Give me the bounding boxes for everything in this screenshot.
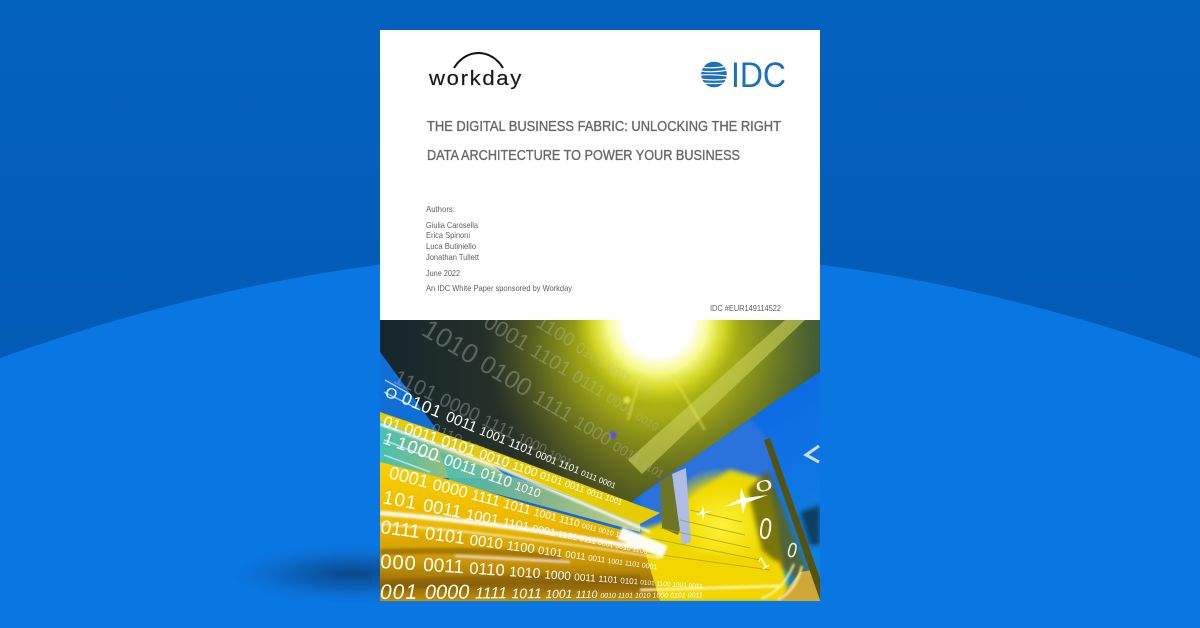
floating digits and chevron at right: 0: [785, 539, 799, 564]
left-hand blue towers: [380, 352, 438, 432]
pale reflection band: [440, 452, 640, 532]
floating digits and chevron at right: 1: [754, 552, 772, 573]
authors and publication details: [426, 204, 573, 293]
white binary digits: O 0101 0011 1001 1101 0001 1101 0111 0001: [386, 388, 615, 488]
floating digits and chevron at right: 0: [757, 511, 774, 546]
diagonal yellow band: [380, 412, 660, 524]
authors and publication details: An IDC White Paper sponsored by Workday: [426, 283, 573, 293]
sun flare: [580, 320, 736, 398]
white binary digits: 0001 0000 1111 1011 1001 1110 0011 0010 1101: [390, 466, 630, 540]
logo: IDC: [700, 56, 786, 95]
icon: striped globe: [700, 62, 728, 87]
title: DATA ARCHITECTURE TO POWER YOUR BUSINESS: [427, 148, 740, 164]
authors and publication details: June 2022: [426, 268, 460, 278]
ghost binary digits on overpass: 1101 0000 1111 1000 1001: [394, 371, 571, 466]
background: lighter blue curved dome: [0, 250, 1200, 628]
white binary digits: 0111 0101 0010 1100 0101 0011 0011 1001 1101 0001: [381, 520, 657, 570]
logo: IDC: IDC: [731, 56, 786, 95]
overpass underside: [380, 320, 820, 510]
title: [427, 119, 781, 164]
sign post: [764, 438, 820, 600]
white binary digits: 001 0000 1111 1011 1001 1110 0010 1101 1010 1000 0101 0011: [380, 584, 702, 600]
overpass beam: [628, 320, 805, 474]
sky: [380, 352, 820, 601]
authors and publication details: Authors:: [426, 204, 455, 214]
ghost binary digits on overpass: 0110 1010 0001: [432, 424, 516, 471]
yellow light trail base: [380, 462, 660, 601]
white binary digits: 01 0011 0101 0010 1100 0101 0011 0011 1001: [384, 416, 622, 506]
authors and publication details: Jonathan Tullett: [426, 252, 480, 262]
white binary digits: 1 1000 0011 0110 1010: [383, 433, 540, 497]
white paper cover page: [380, 30, 820, 601]
authors and publication details: Giulia Carosella: [426, 220, 478, 230]
white light streaks: [380, 424, 802, 600]
tiny building window lines: [640, 510, 770, 570]
far city towers: [640, 418, 775, 530]
logo: workday: workday: [428, 68, 523, 90]
floating digits and chevron at right: [754, 446, 819, 573]
white binary digits: [380, 388, 702, 600]
white binary digits: 000 0011 0110 1010 1000 0011 1101 0101 0101 1100 1001 0011: [381, 554, 702, 588]
logo: workday: [428, 53, 523, 90]
city glow and buildings: [640, 467, 820, 601]
cover photo: light trails, city and binary digits: [380, 320, 820, 601]
lens flare spots: [610, 375, 705, 438]
authors and publication details: Erica Spinoni: [426, 230, 470, 240]
floating digits and chevron at right: 0: [754, 476, 775, 497]
white binary digits: 101 0011 1001 1101 0001 1101 0111 0001 0010 1100: [383, 491, 648, 554]
star glints: [696, 488, 768, 521]
ghost binary digits on overpass: 1100 0101 0011 1000: [536, 320, 652, 396]
ghost binary digits on overpass: 0001 1101 0111 0001 0010: [484, 320, 658, 430]
tower window lines: [384, 380, 440, 472]
authors and publication details: Luca Butiniello: [426, 241, 476, 251]
ghost binary digits on overpass: 1010 0100 1111 1000 0011 1101: [422, 322, 663, 478]
document drop shadow: [227, 544, 477, 604]
document number: IDC #EUR149114522: [710, 303, 781, 313]
title: THE DIGITAL BUSINESS FABRIC: UNLOCKING THE RIGHT: [427, 119, 781, 135]
